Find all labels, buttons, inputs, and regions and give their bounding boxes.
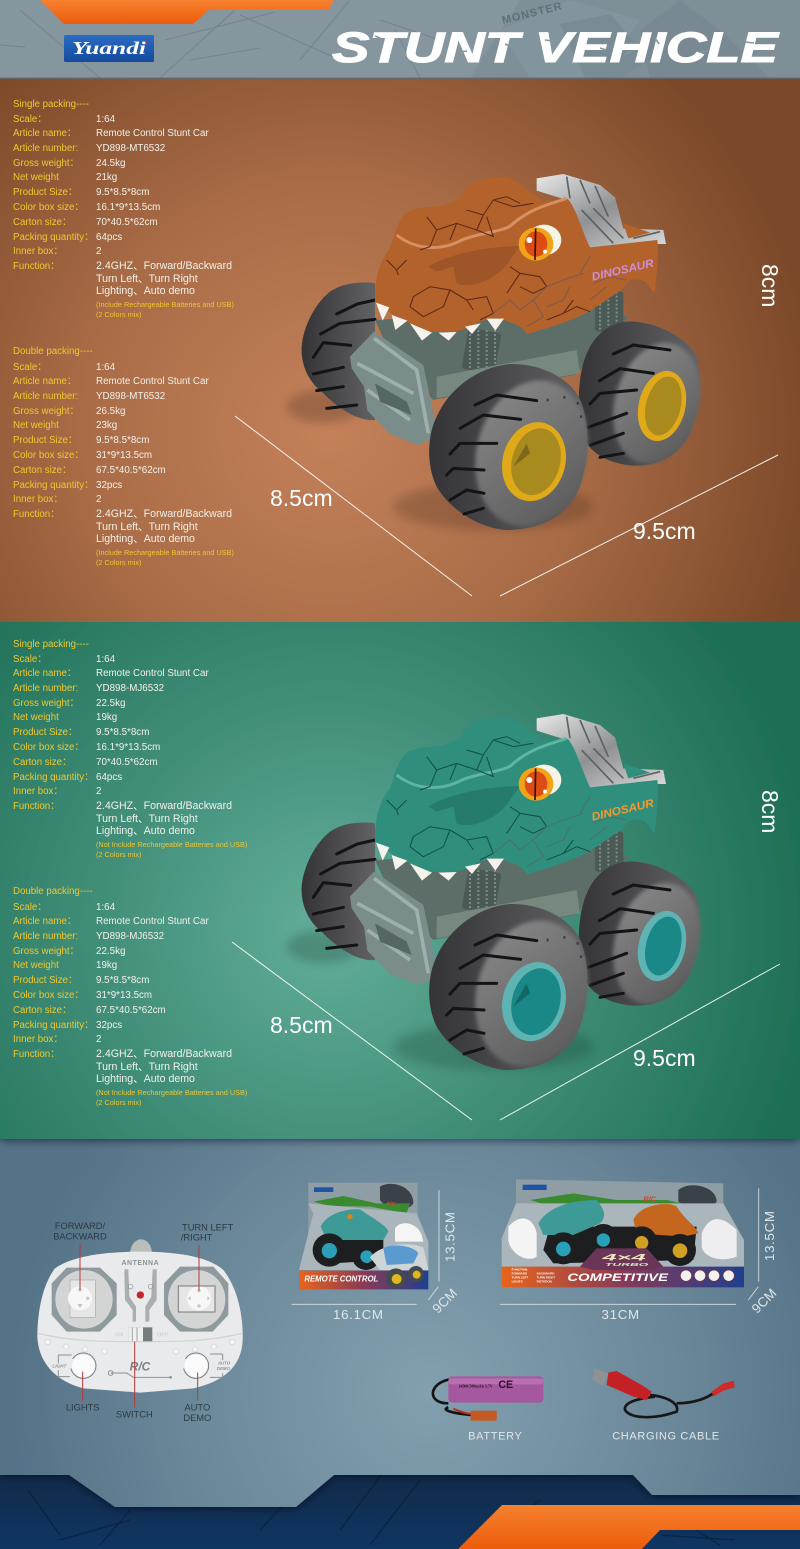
spec block: green single packing: 19kg [96, 712, 117, 723]
spec block: brown double packing: 31*9*13.5cm [96, 450, 152, 461]
accessory labels: BATTERY [468, 1430, 522, 1442]
spec block: brown double packing: Double packing---- [13, 346, 93, 357]
callout labels: AUTO [184, 1403, 210, 1413]
section: green product panel background [0, 622, 800, 1139]
auto demo button: AUTO [217, 1360, 231, 1365]
spec block: green single packing [13, 639, 247, 859]
double box headline: COMPETITIVE [567, 1272, 669, 1284]
spec block: brown single packing: Net weight [13, 172, 59, 183]
spec block: green single packing: Turn Left、Turn Right [96, 813, 198, 825]
remote control diagram [37, 1221, 243, 1423]
spec block: green double packing: 31*9*13.5cm [96, 990, 152, 1001]
callout labels: SWITCH [116, 1410, 153, 1420]
dimension lines and labels: green: 8.5cm [270, 1012, 333, 1038]
spec block: green single packing: Gross weight： [13, 698, 79, 709]
dinosaur head [375, 717, 658, 874]
spec block: green single packing: 64pcs [96, 772, 122, 783]
ghost text: monster: MONSTER [501, 0, 564, 27]
box dimension labels: 9CM [749, 1285, 780, 1316]
spec block: brown double packing: 1:64 [96, 362, 116, 373]
spec block: brown double packing: 67.5*40.5*62cm [96, 465, 166, 476]
spec block: brown single packing: Lighting、Auto demo [96, 285, 195, 297]
dimension lines and labels: brown: 8cm [757, 264, 783, 307]
battery [433, 1376, 543, 1421]
R/C mark: R/C [130, 1360, 151, 1374]
single packaging box: R/C [387, 1201, 396, 1207]
spec block: brown single packing: 24.5kg [96, 158, 125, 169]
auto demo button: DEMO [217, 1366, 230, 1371]
spec block: green single packing: Product Size： [13, 727, 78, 738]
accessories group in crop coordinates [292, 1179, 780, 1442]
dimension lines and labels: brown: 9.5cm [633, 518, 696, 544]
spec block: brown single packing: Packing quantity： [13, 232, 94, 243]
spec block: brown single packing: 21kg [96, 172, 117, 183]
single packaging box [299, 1183, 428, 1289]
box function list [512, 1268, 555, 1284]
spec block: brown double packing: Product Size： [13, 435, 78, 446]
spec block: brown double packing: Color box size： [13, 450, 84, 461]
decorative dots [45, 1339, 235, 1354]
title: STUNT VEHICLE [332, 24, 780, 72]
spec block: brown single packing [13, 99, 234, 319]
R/C mark [108, 1360, 172, 1379]
header band [0, 0, 800, 79]
spec block: brown single packing: YD898-MT6532 [96, 143, 165, 154]
spec block: brown double packing: Net weight [13, 420, 59, 431]
spec block: green single packing: 16.1*9*13.5cm [96, 742, 160, 753]
spec block: brown double packing: 26.5kg [96, 406, 125, 417]
header orange tab [40, 0, 334, 24]
dinosaur head [375, 177, 658, 334]
spec block: brown single packing: Article number: [13, 143, 78, 154]
spec block: green double packing: Function： [13, 1049, 60, 1060]
dimension lines and labels: green [232, 695, 783, 1120]
box dimension labels: 13.5CM [762, 1210, 777, 1261]
logo: Yuandi [64, 35, 154, 62]
power switch: OFF [157, 1333, 169, 1339]
spec block: brown double packing: Gross weight： [13, 406, 79, 417]
double packaging box: TURBO [605, 1262, 650, 1267]
spec block: green single packing: 1:64 [96, 654, 116, 665]
power switch: ON [115, 1333, 123, 1339]
spec block: green double packing: Carton size： [13, 1005, 72, 1016]
callout labels: DEMO [183, 1413, 211, 1423]
spec block: brown single packing: Function： [13, 261, 60, 272]
spec block: green double packing: Remote Control Stunt Car [96, 916, 209, 927]
logo: Yuandi: Yuandi [72, 38, 146, 58]
spec block: green single packing: (2 Colors mix) [96, 850, 141, 859]
accessory labels: CHARGING CABLE [612, 1430, 720, 1442]
spec block: brown single packing: Article name： [13, 128, 77, 139]
spec block: brown single packing: Single packing---- [13, 99, 89, 110]
double packaging box [502, 1179, 744, 1287]
spec block: green double packing: Inner box： [13, 1034, 63, 1045]
spec block: green single packing: Scale： [13, 654, 47, 665]
box function list: LIGHTS [512, 1280, 523, 1284]
spec block: green single packing: Carton size： [13, 757, 72, 768]
spec block: green double packing: Net weight [13, 960, 59, 971]
spec block: green single packing: Net weight [13, 712, 59, 723]
spec block: brown single packing: Gross weight： [13, 158, 79, 169]
spec block: green double packing: Article number: [13, 931, 78, 942]
accessory labels [468, 1430, 720, 1442]
right joystick [164, 1267, 228, 1332]
spec block: green single packing: (Not Include Rechargeable Batteries and USB) [96, 840, 247, 849]
spec block: green double packing [13, 886, 247, 1107]
spec block: brown single packing: 2 [96, 246, 101, 257]
box function list: FUNCTION: [512, 1268, 528, 1272]
spec block: brown double packing: YD898-MT6532 [96, 391, 165, 402]
antenna label: ANTENNA [122, 1260, 159, 1267]
spec block: brown single packing: 2.4GHZ、Forward/Backward [96, 260, 232, 272]
spec block: brown double packing: Lighting、Auto demo [96, 533, 195, 545]
spec block: green double packing: 2.4GHZ、Forward/Backward [96, 1048, 232, 1060]
auto demo button [183, 1353, 231, 1378]
spec block: green single packing: Article number: [13, 683, 78, 694]
callout labels: TURN LEFT [182, 1222, 234, 1232]
section: accessories background [0, 1130, 800, 1507]
spec block: green double packing: 9.5*8.5*8cm [96, 975, 149, 986]
spec block: green double packing: 67.5*40.5*62cm [96, 1005, 166, 1016]
spec block: green double packing: Turn Left、Turn Right [96, 1061, 198, 1073]
footer orange accent [458, 1505, 800, 1549]
dimension lines and labels: brown [235, 165, 783, 596]
spec block: brown double packing: Article number: [13, 391, 78, 402]
section: brown product panel background [0, 70, 800, 622]
callout lines [80, 1243, 199, 1407]
spec block: green single packing: Remote Control Stunt Car [96, 668, 209, 679]
spec block: green single packing: YD898-MJ6532 [96, 683, 164, 694]
spec block: green single packing: 2.4GHZ、Forward/Backward [96, 800, 232, 812]
product image: green dinosaur truck [287, 714, 714, 1079]
spec block: green double packing: Product Size： [13, 975, 78, 986]
battery: 14500/500mAh 3.7V [458, 1384, 493, 1389]
spec block: brown single packing: (Include Rechargeable Batteries and USB) [96, 300, 234, 309]
box dimension labels: 31CM [602, 1307, 640, 1322]
light button: LIGHT [52, 1364, 67, 1369]
remote body [37, 1252, 243, 1393]
spec block: brown single packing: Turn Left、Turn Right [96, 273, 198, 285]
wing label: DINOSAUR [591, 797, 656, 824]
spec block: brown single packing: Product Size： [13, 187, 78, 198]
spec block: brown double packing: Inner box： [13, 494, 63, 505]
spec block: brown double packing: 23kg [96, 420, 117, 431]
dimension lines and labels: green: 9.5cm [633, 1045, 696, 1071]
spec block: green double packing: 19kg [96, 960, 117, 971]
4x4 turbo emblem: 4×4 [600, 1253, 648, 1263]
spec block: brown double packing: (Include Rechargeable Batteries and USB) [96, 548, 234, 557]
dimension lines and labels: brown: 8.5cm [270, 485, 333, 511]
spec block: brown single packing: 70*40.5*62cm [96, 217, 158, 228]
battery: CE [498, 1379, 513, 1391]
callout labels: FORWARD/ [55, 1221, 106, 1231]
box function list: TURN RIGHT [537, 1276, 555, 1280]
spec block: green double packing: 22.5kg [96, 946, 125, 957]
spec block: green double packing: Double packing---- [13, 886, 93, 897]
spec block: brown double packing: Function： [13, 509, 60, 520]
spec block: green single packing: Color box size： [13, 742, 84, 753]
spec block: brown double packing: Carton size： [13, 465, 72, 476]
spec block: green double packing: 32pcs [96, 1020, 122, 1031]
callout labels: /RIGHT [181, 1233, 213, 1243]
spec block: green double packing: Packing quantity： [13, 1020, 94, 1031]
spec block: brown double packing: 2.4GHZ、Forward/Backward [96, 508, 232, 520]
spec block: green double packing: Color box size： [13, 990, 84, 1001]
spec block: brown single packing: 1:64 [96, 114, 116, 125]
spec block: green double packing: (2 Colors mix) [96, 1098, 141, 1107]
single box headline: REMOTE CONTROL [304, 1274, 378, 1283]
spec block: green single packing: Article name： [13, 668, 77, 679]
spec block: green double packing: Lighting、Auto demo [96, 1073, 195, 1085]
spec block: brown double packing: Remote Control Stunt Car [96, 376, 209, 387]
spec block: green single packing: Single packing---- [13, 639, 89, 650]
spec block: green single packing: 70*40.5*62cm [96, 757, 158, 768]
spec block: brown double packing: Turn Left、Turn Right [96, 521, 198, 533]
spec block: green single packing: Inner box： [13, 786, 63, 797]
box function list: ROTATION [537, 1280, 552, 1284]
box dimension lines [292, 1188, 759, 1304]
spec block: brown double packing: Article name： [13, 376, 77, 387]
spec block: green double packing: Scale： [13, 902, 47, 913]
spec block: green single packing: 9.5*8.5*8cm [96, 727, 149, 738]
spec block: brown single packing: (2 Colors mix) [96, 310, 141, 319]
spec block: brown single packing: Carton size： [13, 217, 72, 228]
box function list: FORWARD [512, 1272, 528, 1276]
spec block: green double packing: YD898-MJ6532 [96, 931, 164, 942]
box function list: BACKWARD [537, 1272, 555, 1276]
spec block: brown double packing: Packing quantity： [13, 480, 94, 491]
box dimension labels [333, 1210, 780, 1322]
center decoration and LED [124, 1269, 157, 1322]
box dimension labels: 13.5CM [443, 1211, 458, 1262]
footer background [0, 1465, 800, 1549]
antenna [130, 1239, 152, 1253]
spec block: brown single packing: Inner box： [13, 246, 63, 257]
callout labels: BACKWARD [53, 1231, 107, 1241]
wing label: DINOSAUR [591, 257, 656, 284]
spec block: green single packing: 2 [96, 786, 101, 797]
spec block: green single packing: Lighting、Auto demo [96, 825, 195, 837]
spec block: green double packing: Gross weight： [13, 946, 79, 957]
badges [680, 1270, 734, 1281]
spec block: green double packing: 1:64 [96, 902, 116, 913]
power switch [115, 1327, 169, 1341]
box dimension labels: 9CM [429, 1285, 460, 1316]
spec block: green double packing: 2 [96, 1034, 101, 1045]
spec block: brown single packing: 64pcs [96, 232, 122, 243]
spec block: brown double packing: Scale： [13, 362, 47, 373]
charging cable [592, 1368, 735, 1417]
double packaging box: R/C [643, 1195, 657, 1204]
spec block: brown double packing: 2 [96, 494, 101, 505]
spec block: brown single packing: Scale： [13, 114, 47, 125]
spec block: brown double packing [13, 346, 234, 567]
callout labels [53, 1221, 234, 1423]
left joystick [52, 1268, 117, 1332]
spec block: brown single packing: Color box size： [13, 202, 84, 213]
box dimension labels: 16.1CM [333, 1307, 384, 1322]
spec block: green double packing: (Not Include Rechargeable Batteries and USB) [96, 1088, 247, 1097]
spec block: brown double packing: 9.5*8.5*8cm [96, 435, 149, 446]
box function list: TURN LEFT [512, 1276, 528, 1280]
spec block: green single packing: Function： [13, 801, 60, 812]
spec block: brown single packing: 9.5*8.5*8cm [96, 187, 149, 198]
spec block: brown double packing: 32pcs [96, 480, 122, 491]
spec block: brown single packing: Remote Control Stunt Car [96, 128, 209, 139]
spec block: green single packing: Packing quantity： [13, 772, 94, 783]
spec block: brown double packing: (2 Colors mix) [96, 558, 141, 567]
dimension lines and labels: green: 8cm [757, 790, 783, 833]
spec block: brown single packing: 16.1*9*13.5cm [96, 202, 160, 213]
product image: brown dinosaur truck [287, 174, 714, 539]
callout labels: LIGHTS [66, 1403, 100, 1413]
spec block: green double packing: Article name： [13, 916, 77, 927]
spec block: green single packing: 22.5kg [96, 698, 125, 709]
light button [52, 1353, 96, 1378]
